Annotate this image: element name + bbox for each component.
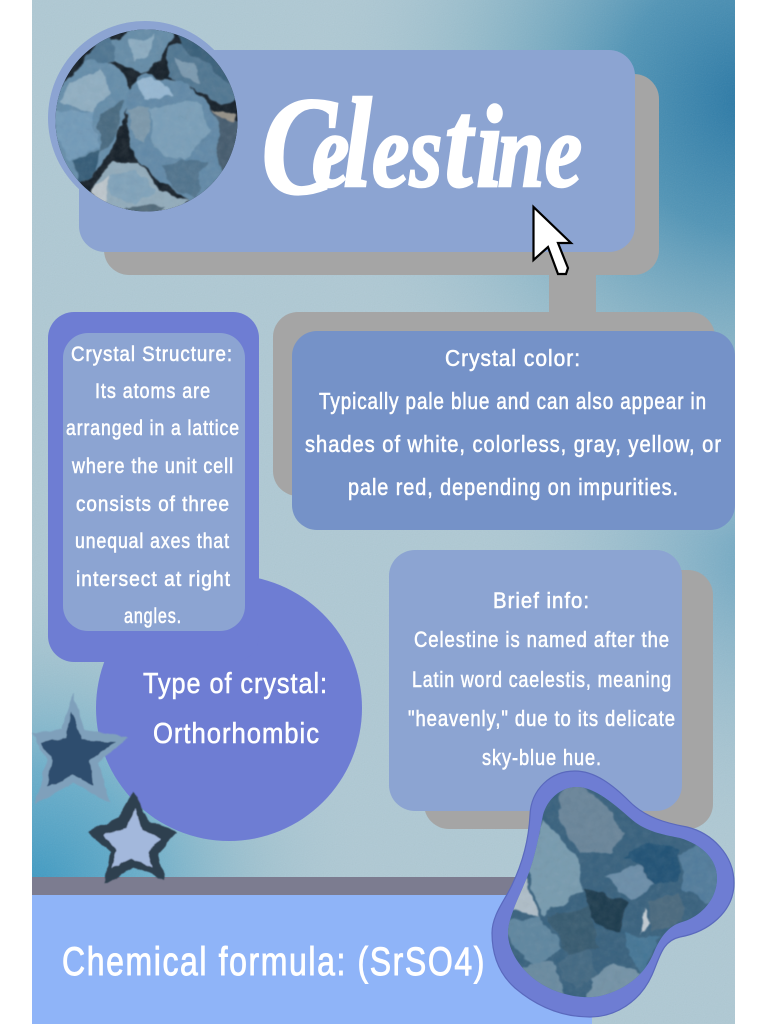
text: chemical formula: Chemical formula: (SrSO4) bbox=[62, 940, 486, 984]
center big rock bbox=[125, 75, 224, 204]
crystal color panel shadow bbox=[273, 312, 715, 496]
photo: celestine rocks bbox=[56, 30, 238, 212]
title panel bbox=[79, 50, 635, 252]
title panel shadow bbox=[104, 74, 659, 275]
text block: brief info: Celestine is named after the bbox=[414, 627, 670, 652]
title: Celestine: e bbox=[312, 92, 349, 209]
text block: crystal structure: arranged in a lattice bbox=[66, 417, 240, 440]
text block: crystal color bbox=[305, 388, 722, 500]
right upper rock bbox=[168, 40, 242, 106]
type of crystal circle bbox=[96, 575, 362, 841]
heading: crystal color: Crystal color: bbox=[445, 345, 581, 371]
bottom rock bbox=[92, 160, 190, 210]
top rock bbox=[112, 24, 172, 76]
text block: brief info bbox=[408, 627, 676, 770]
brief info panel shadow bbox=[424, 570, 713, 829]
text block: crystal structure: angles. bbox=[124, 605, 182, 628]
text block: crystal structure: unequal axes that bbox=[75, 530, 230, 553]
panel: crystal color bbox=[292, 331, 735, 530]
title: Celestine: i bbox=[476, 82, 503, 213]
left rock bbox=[50, 60, 128, 184]
text: type of crystal: Orthorhombic bbox=[153, 718, 320, 750]
text block: brief info: sky-blue hue. bbox=[482, 745, 602, 770]
icon: pixel cursor arrow bbox=[534, 207, 571, 274]
text block: crystal color: pale red, depending on impurities. bbox=[348, 474, 679, 500]
panel: brief info bbox=[389, 550, 682, 811]
title: Celestine: l bbox=[343, 73, 372, 215]
text block: crystal structure: consists of three bbox=[76, 493, 230, 516]
text block: crystal structure: where the unit cell bbox=[71, 455, 234, 478]
connector between title and crystal color panel bbox=[549, 270, 596, 320]
text block: brief info: "heavenly," due to its delicate bbox=[408, 706, 676, 731]
icon: denim star large bbox=[32, 693, 129, 804]
text: type of crystal bbox=[143, 668, 328, 750]
heading: brief info: Brief info: bbox=[493, 588, 590, 613]
title: Celestine: n bbox=[498, 92, 544, 209]
panel: chemical formula footer bbox=[32, 895, 592, 1024]
title: Celestine: e bbox=[372, 92, 409, 209]
title: Celestine: e bbox=[545, 92, 582, 209]
text block: crystal structure bbox=[66, 380, 240, 628]
text block: crystal color: shades of white, colorless, gray, yellow, or bbox=[305, 431, 722, 457]
crystal structure outer panel bbox=[48, 312, 259, 662]
panel: crystal structure bbox=[63, 333, 245, 631]
text: type of crystal: Type of crystal: bbox=[143, 668, 328, 700]
heading: crystal structure: Crystal Structure: bbox=[71, 343, 233, 366]
photo: celestine cluster bbox=[508, 787, 717, 998]
title: Celestine: t bbox=[445, 76, 476, 214]
icon: denim star small bbox=[88, 792, 177, 884]
title photo frame bbox=[48, 21, 242, 215]
text block: crystal structure: Its atoms are bbox=[95, 380, 211, 403]
photo frame: blob bbox=[492, 771, 734, 1017]
text block: crystal structure: intersect at right bbox=[76, 568, 231, 591]
text block: brief info: Latin word caelestis, meaning bbox=[412, 667, 672, 692]
title: Celestine: s bbox=[409, 92, 442, 209]
footer strip bbox=[32, 877, 522, 895]
title: Celestine: C bbox=[262, 69, 338, 224]
right lower rock bbox=[209, 108, 238, 172]
